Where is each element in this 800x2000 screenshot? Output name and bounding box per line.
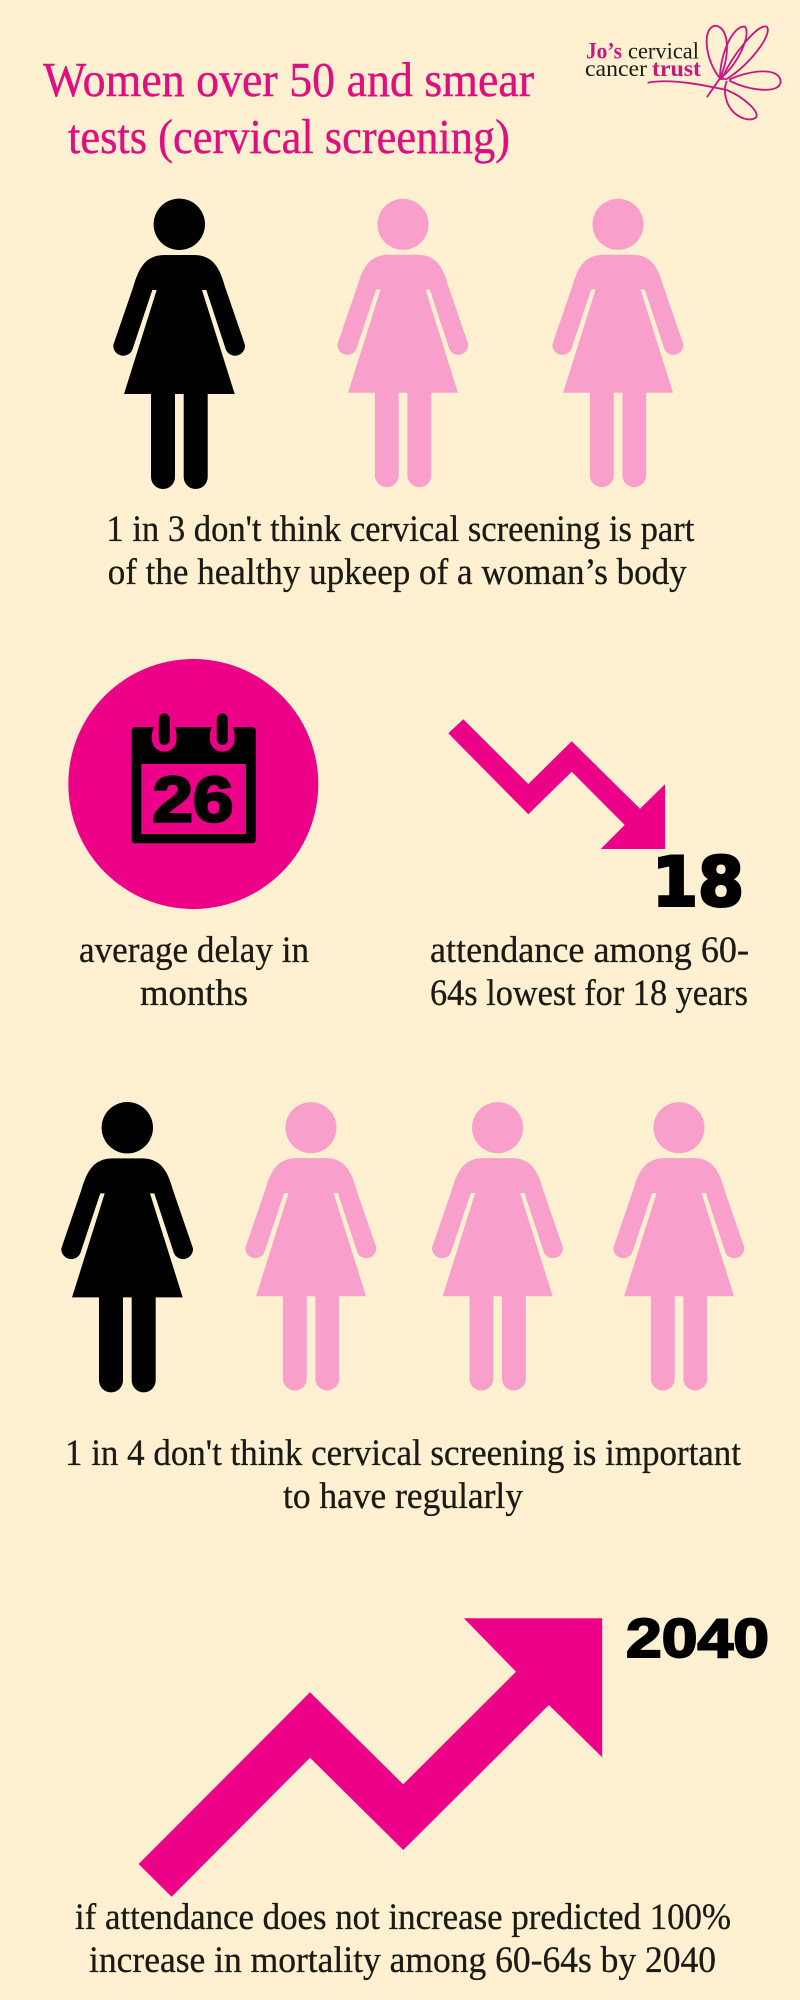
- text: average delay in months: [79, 929, 309, 1013]
- text: average delay in months: average delay in: [79, 929, 309, 970]
- icon: pink woman: [552, 199, 683, 487]
- logo: Jo's cervical cancer trust: cervical: [628, 38, 699, 64]
- text: mortality prediction: increase in mortality among 60-64s by 2040: [89, 1939, 716, 1980]
- text: 1 in 3 statement: [106, 508, 694, 592]
- text: 1 in 4 statement: to have regularly: [283, 1475, 524, 1516]
- icon: pink woman: [432, 1102, 563, 1391]
- icon: pink woman: [245, 1102, 376, 1391]
- logo: Jo's cervical cancer trust: [585, 26, 781, 119]
- text: 1 in 4 statement: 1 in 4 don't think cervical screening is important: [65, 1432, 741, 1473]
- row 1: 1 in 3 women pictogram: [113, 199, 683, 489]
- text: 1 in 4 statement: [65, 1432, 741, 1516]
- number: 2040: 2040: [626, 1607, 769, 1669]
- icon: pink woman: [337, 199, 468, 487]
- text: average delay in months: months: [140, 972, 248, 1013]
- logo: Jo's cervical cancer trust: trust: [652, 56, 701, 81]
- icon: calendar in pink circle: [68, 659, 318, 909]
- text: attendance among 60-64s: attendance among 60-: [430, 929, 749, 970]
- text: attendance among 60-64s: [430, 929, 749, 1013]
- icon: black woman: [113, 199, 245, 489]
- text: attendance among 60-64s: 64s lowest for 18 years: [430, 972, 748, 1013]
- row 2: 1 in 4 women pictogram: [61, 1102, 744, 1392]
- arrow: downward trend: [448, 719, 665, 849]
- title: tests (cervical screening): [68, 109, 510, 164]
- logo: Jo's cervical cancer trust: Jo’s: [586, 38, 622, 64]
- number: 18: 18: [652, 844, 744, 922]
- text: mortality prediction: [75, 1896, 731, 1980]
- icon: black woman: [61, 1102, 193, 1392]
- logo: Jo's cervical cancer trust: cancer: [585, 56, 647, 81]
- icon: calendar in pink circle: 26: [152, 764, 234, 836]
- text: mortality prediction: if attendance does not increase predicted 100%: [75, 1896, 731, 1937]
- title: Women over 50 and smear: [43, 52, 534, 107]
- title: [43, 52, 534, 164]
- arrow: upward trend: [139, 1618, 602, 1897]
- icon: pink woman: [613, 1102, 744, 1391]
- text: 1 in 3 statement: of the healthy upkeep of a woman’s body: [108, 551, 687, 592]
- text: 1 in 3 statement: 1 in 3 don't think cervical screening is part: [106, 508, 694, 549]
